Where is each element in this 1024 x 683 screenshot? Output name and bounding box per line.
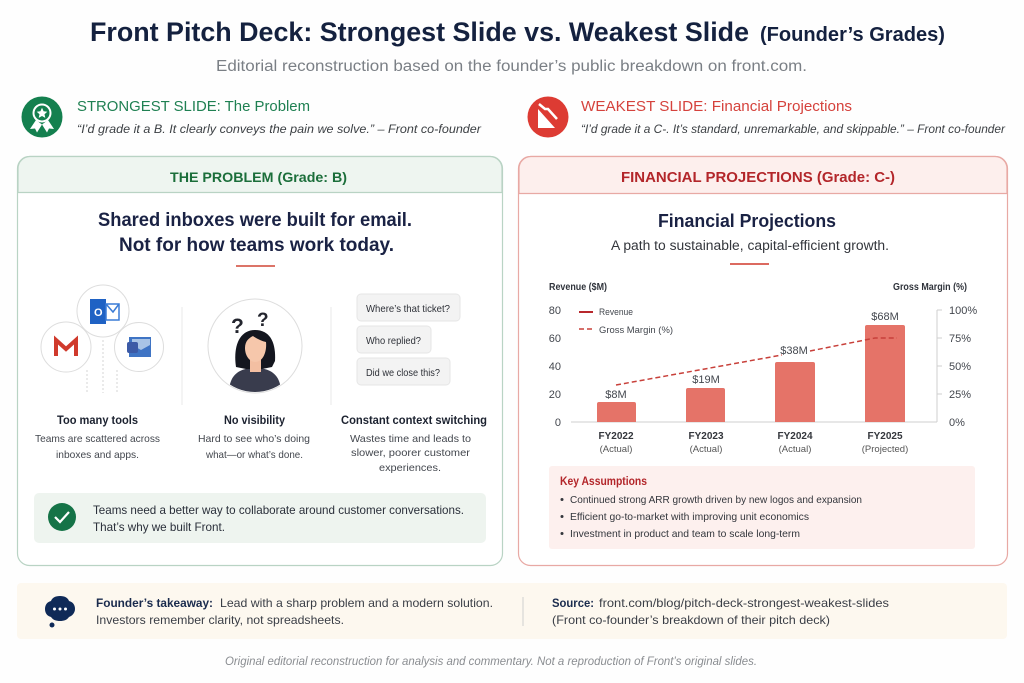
column: no visibility: Hard to see who’s doing bbox=[198, 433, 310, 445]
legend bbox=[579, 307, 673, 336]
column: too many tools: Teams are scattered across bbox=[35, 433, 160, 445]
strongest quote: “I’d grade it a B. It clearly conveys the pain we solve.” – Front co-founder bbox=[77, 124, 482, 136]
footnote: Original editorial reconstruction for analysis and commentary. Not a reproduction of Front’s original slides. bbox=[225, 656, 757, 668]
column: context switching: Wastes time and leads to bbox=[350, 433, 471, 445]
weakest slide summary bbox=[528, 96, 1006, 138]
assumptions heading: Key Assumptions bbox=[560, 476, 647, 488]
value labels: $38M bbox=[780, 345, 808, 357]
icon: falling chart bbox=[528, 96, 568, 138]
axis labels: 0% bbox=[949, 417, 965, 429]
axis labels: 40 bbox=[549, 361, 561, 373]
x axis labels: FY2024 bbox=[777, 431, 813, 442]
gross margin line bbox=[616, 338, 897, 385]
takeaway text: Founder’s takeaway: bbox=[96, 596, 213, 610]
axis labels: 50% bbox=[949, 361, 971, 373]
x axis labels: FY2022 bbox=[598, 431, 634, 442]
column: no visibility: No visibility bbox=[224, 415, 286, 427]
icon: scattered email tools bbox=[41, 285, 164, 393]
source text: Source: bbox=[552, 596, 594, 610]
title: (Founder’s Grades) bbox=[760, 24, 945, 46]
icon: chat bubbles bbox=[357, 294, 460, 385]
icon: chat bubbles: Where’s that ticket? bbox=[366, 303, 450, 315]
axis labels: 25% bbox=[949, 389, 971, 401]
icon: confused person bbox=[208, 299, 302, 393]
legend: Revenue bbox=[599, 307, 633, 318]
takeaway text bbox=[96, 596, 493, 627]
slide headline: Shared inboxes were built for email. bbox=[98, 210, 412, 231]
panel header: THE PROBLEM (Grade: B) bbox=[170, 169, 347, 185]
callout: why we built Front bbox=[34, 493, 486, 543]
value labels bbox=[605, 311, 899, 401]
x axis labels: (Actual) bbox=[600, 444, 632, 455]
x axis labels bbox=[598, 431, 908, 455]
icon: scattered email tools: O bbox=[94, 307, 103, 319]
column: too many tools bbox=[35, 415, 160, 461]
assumptions list: Investment in product and team to scale long-term bbox=[570, 528, 800, 540]
bars bbox=[597, 325, 905, 422]
icon: check mark bbox=[48, 503, 76, 531]
x axis labels: (Actual) bbox=[779, 444, 811, 455]
chart: revenue and gross margin: Revenue ($M) bbox=[549, 282, 607, 293]
panel: the problem bbox=[18, 156, 502, 566]
column: context switching: slower, poorer customer bbox=[351, 447, 471, 459]
column: context switching bbox=[341, 415, 487, 474]
slide subtitle: A path to sustainable, capital-efficient growth. bbox=[611, 238, 889, 253]
assumptions list bbox=[560, 494, 862, 540]
slide headline bbox=[98, 210, 412, 256]
chart: revenue and gross margin bbox=[549, 282, 977, 455]
x axis labels: (Actual) bbox=[690, 444, 722, 455]
axis labels: 75% bbox=[949, 333, 971, 345]
takeaway text: Investors remember clarity, not spreadsheets. bbox=[96, 613, 344, 627]
strongest slide summary bbox=[22, 96, 482, 138]
title: Front Pitch Deck: Strongest Slide vs. Weakest Slide bbox=[90, 17, 749, 47]
callout: why we built Front: That’s why we built Front. bbox=[93, 520, 225, 534]
panel: financial projections bbox=[518, 156, 1008, 566]
x axis labels: FY2023 bbox=[688, 431, 724, 442]
column: context switching: Constant context switching bbox=[341, 415, 487, 427]
callout: why we built Front: Teams need a better way to collaborate around customer conversations. bbox=[93, 503, 464, 517]
icon: thought bubble bbox=[45, 596, 75, 628]
slide headline: Not for how teams work today. bbox=[119, 235, 394, 256]
legend: Gross Margin (%) bbox=[599, 325, 673, 336]
column: no visibility bbox=[198, 415, 310, 461]
weakest heading: WEAKEST SLIDE: Financial Projections bbox=[581, 98, 852, 115]
takeaway text: Lead with a sharp problem and a modern solution. bbox=[220, 596, 493, 610]
source text bbox=[552, 596, 889, 627]
strongest heading: STRONGEST SLIDE: The Problem bbox=[77, 98, 310, 115]
axis labels: 0 bbox=[555, 417, 561, 429]
value labels: $19M bbox=[692, 374, 720, 386]
footer takeaway bar bbox=[17, 583, 1007, 639]
axis labels: 60 bbox=[549, 333, 561, 345]
icon: confused person: ? bbox=[257, 310, 269, 331]
axis labels bbox=[549, 305, 977, 429]
key assumptions box bbox=[549, 466, 975, 549]
assumptions list: Continued strong ARR growth driven by new logos and expansion bbox=[570, 494, 862, 506]
axis labels: 80 bbox=[549, 305, 561, 317]
source text: (Front co-founder’s breakdown of their pitch deck) bbox=[552, 613, 830, 627]
icon: award ribbon bbox=[22, 96, 62, 138]
x axis labels: (Projected) bbox=[862, 444, 908, 455]
value labels: $68M bbox=[871, 311, 899, 323]
column: too many tools: Too many tools bbox=[57, 415, 138, 427]
icon: chat bubbles: Who replied? bbox=[366, 335, 421, 347]
column: no visibility: what—or what’s done. bbox=[205, 449, 303, 461]
slide headline: Financial Projections bbox=[658, 210, 836, 231]
axis labels: 100% bbox=[949, 305, 977, 317]
value labels: $8M bbox=[605, 389, 627, 401]
x axis labels: FY2025 bbox=[867, 431, 903, 442]
icon: chat bubbles: Did we close this? bbox=[366, 367, 440, 379]
axis labels: 20 bbox=[549, 389, 561, 401]
column: too many tools: inboxes and apps. bbox=[56, 449, 139, 461]
weakest quote: “I’d grade it a C-. It’s standard, unremarkable, and skippable.” – Front co-founder bbox=[581, 124, 1006, 136]
icon: confused person: ? bbox=[231, 315, 244, 338]
chart: revenue and gross margin: Gross Margin (%) bbox=[893, 282, 967, 293]
assumptions list: Efficient go-to-market with improving unit economics bbox=[570, 511, 809, 523]
subtitle: Editorial reconstruction based on the founder’s public breakdown on front.com. bbox=[216, 58, 807, 75]
panel header: FINANCIAL PROJECTIONS (Grade: C-) bbox=[621, 170, 895, 186]
source text: front.com/blog/pitch-deck-strongest-weakest-slides bbox=[599, 596, 889, 610]
column: context switching: experiences. bbox=[379, 462, 441, 474]
